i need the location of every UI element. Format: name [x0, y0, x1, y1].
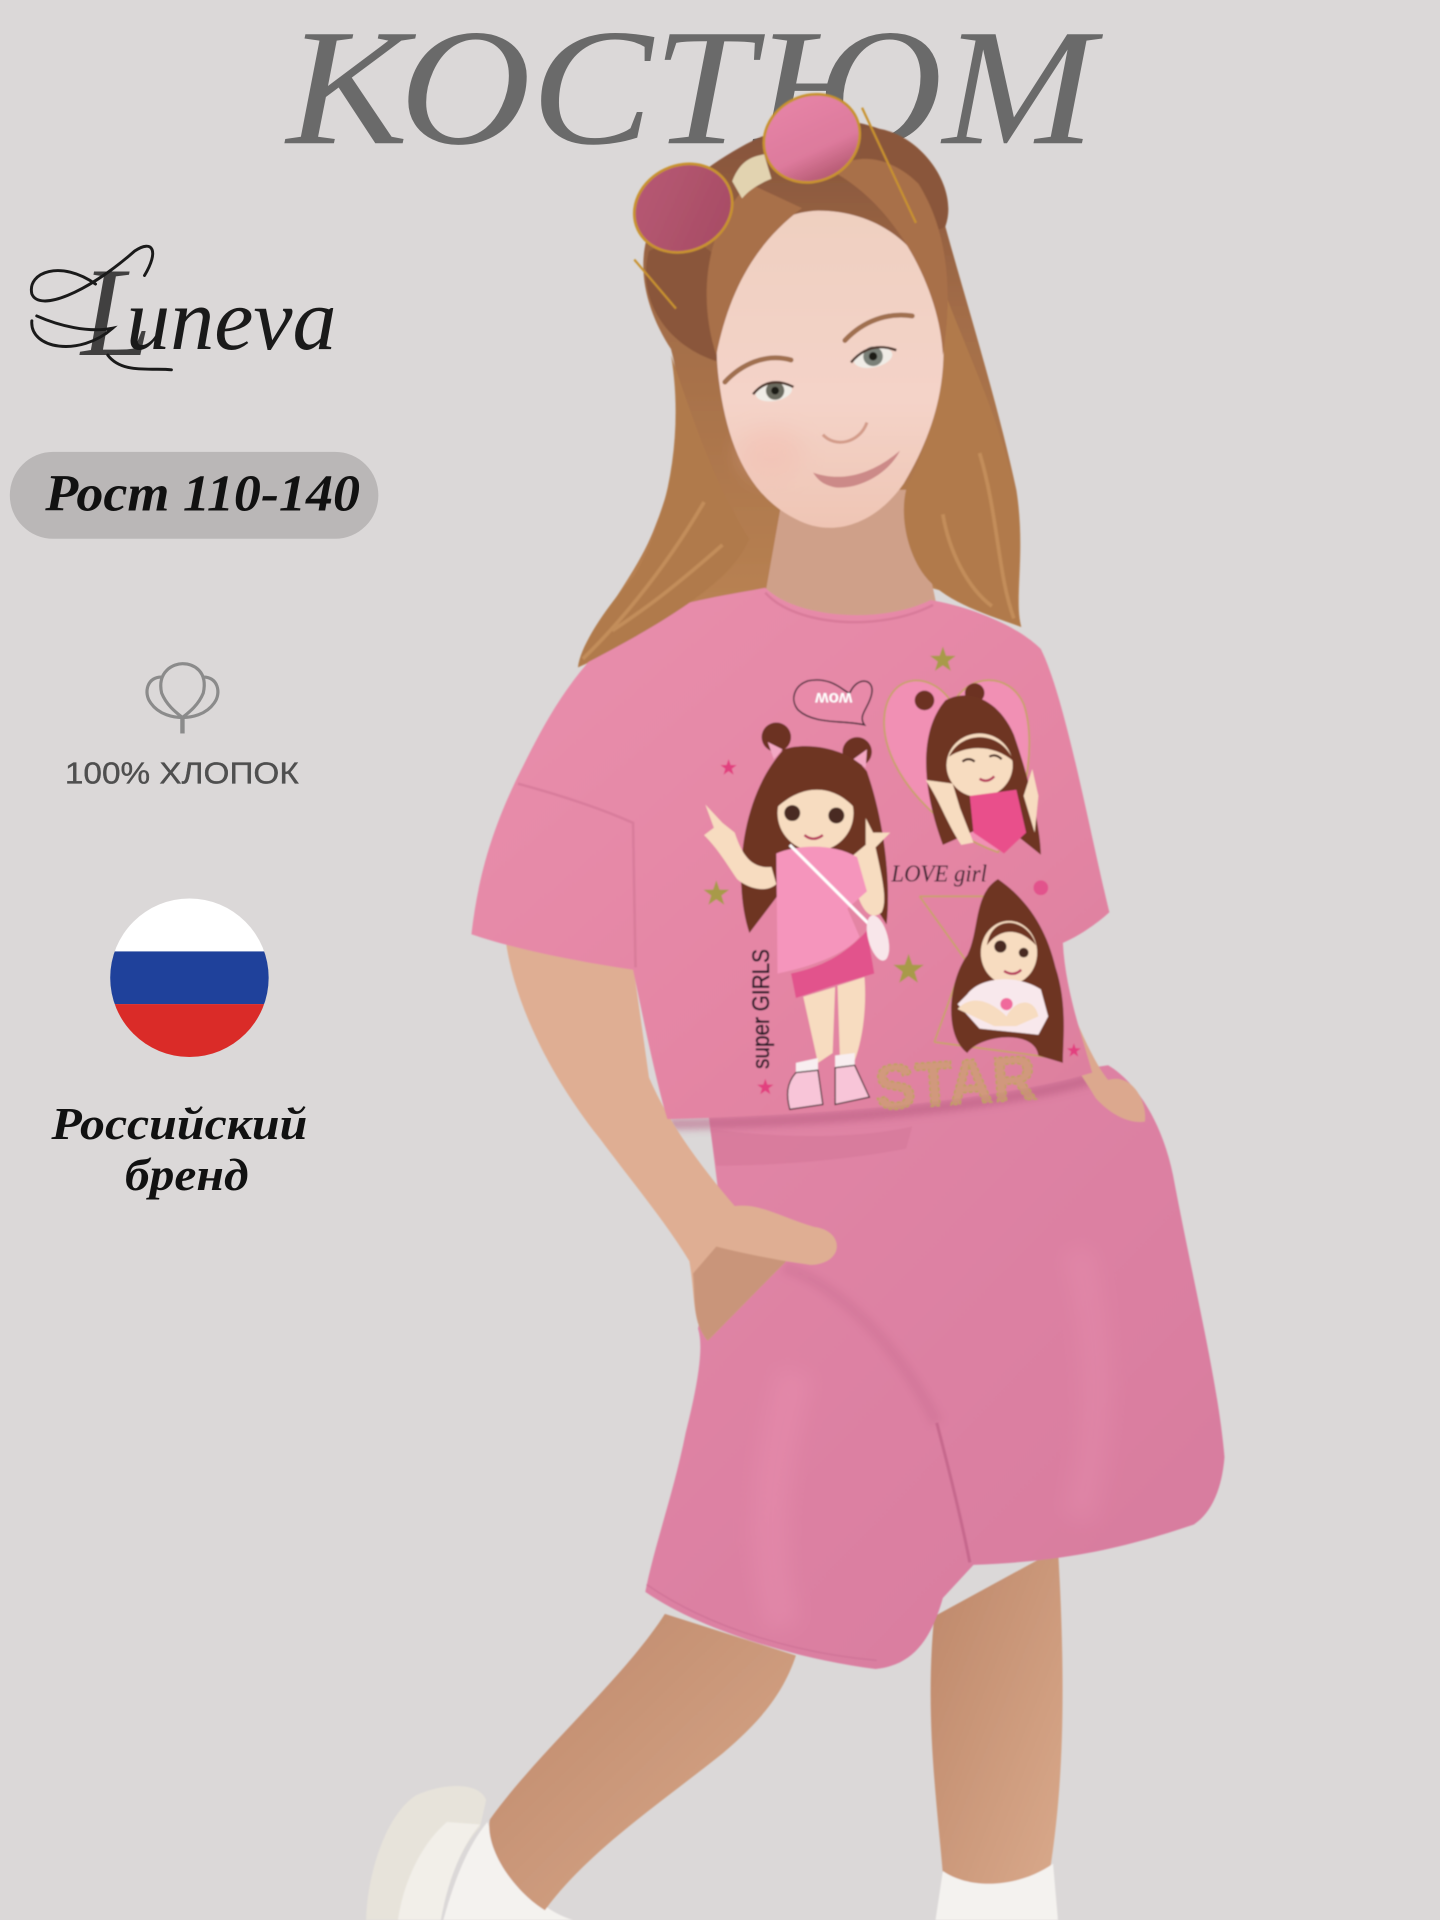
print: love heart [884, 680, 1029, 852]
logo: Luneva: L [79, 242, 152, 383]
print: main girl [704, 722, 893, 1109]
t-shirt [471, 588, 1109, 1119]
logo: Luneva [31, 242, 337, 383]
brand caption: Российский [50, 1099, 307, 1149]
left arm and hand [506, 940, 837, 1341]
print: star outline [920, 896, 1054, 1058]
neck [765, 490, 937, 619]
height pill: Рост 110-140 [44, 466, 360, 523]
photo: girl in pink outfit [366, 79, 1224, 1920]
right leg with sock [931, 1549, 1063, 1920]
print: wow heart [794, 680, 872, 725]
print: STAR text: STAR [872, 1042, 1039, 1124]
brand caption [50, 1099, 307, 1200]
print: bottom right girl [951, 879, 1064, 1063]
face [717, 211, 944, 528]
icon: russian flag [108, 896, 272, 1059]
brand caption: бренд [125, 1150, 249, 1200]
print: LOVE girl text: LOVE girl [890, 861, 987, 888]
cotton label: 100% ХЛОПОК [65, 757, 299, 791]
shorts [645, 1065, 1224, 1669]
title: КОСТЮМ [284, 0, 1104, 180]
t-shirt print [704, 647, 1081, 1124]
print: top right girl [915, 683, 1041, 855]
back hair [578, 120, 1021, 667]
logo: Luneva: uneva [126, 271, 337, 369]
right arm and hand [1047, 967, 1145, 1122]
hair parting [707, 159, 948, 355]
hair buns [646, 128, 948, 361]
front hair locks [578, 294, 1021, 667]
print: stars [704, 647, 1081, 1094]
sunglasses [620, 79, 916, 309]
print: super GIRLS text: super GIRLS [748, 949, 775, 1069]
left leg with shoe and sock [366, 1614, 796, 1920]
print: wow heart: wow [814, 689, 853, 709]
height pill [10, 452, 378, 539]
icon: cotton [147, 664, 218, 733]
